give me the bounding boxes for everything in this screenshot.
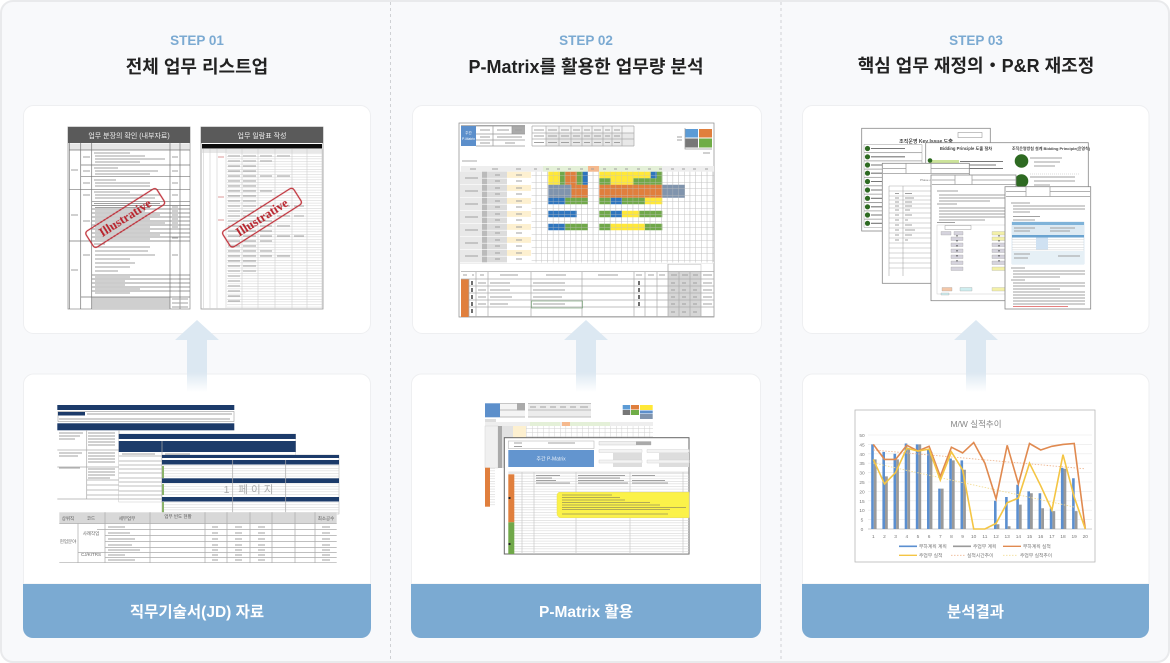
document: JD competency sheet: [119, 434, 296, 502]
footer bar: analysis result: [802, 584, 1149, 638]
footer label: P-Matrix 활용: [539, 603, 633, 621]
chart gridlines and axis: 0: [861, 527, 864, 533]
chart gridlines and axis: 25: [859, 480, 865, 486]
step label 02: STEP 02: [559, 33, 613, 48]
document: workload summary table: 상위직: [62, 515, 74, 522]
yellow callout: [557, 492, 689, 518]
document: P-Matrix front sheet: [504, 438, 689, 554]
document: workload summary table: 현업분야: [60, 538, 76, 545]
card: P-Matrix usage: [412, 374, 760, 584]
panel: step 02: [411, 33, 762, 638]
document: workload summary table: 업무 빈도 현황: [164, 513, 192, 520]
stamp: Illustrative: [221, 187, 303, 248]
footer label: 분석결과: [947, 603, 1004, 621]
arrow: up: [564, 320, 608, 392]
card: analysis result: [802, 374, 1149, 584]
chart gridlines and axis: 9: [961, 534, 964, 540]
document: P-Matrix weekly grid: [459, 123, 714, 317]
document: role confirmation table: 업무 분장의 확인 (내부자료): [88, 131, 170, 140]
chart gridlines and axis: 10: [971, 534, 977, 540]
blue title box: [508, 450, 594, 467]
chart legend: 부하계획 실적: [1023, 543, 1051, 550]
chart gridlines and axis: 15: [1027, 534, 1032, 540]
document: workload summary table: CJ/KITRS: [81, 552, 101, 557]
chart legend: 실적시간추이: [967, 552, 993, 559]
document: P-Matrix back sheet: [485, 403, 653, 507]
document: workload summary table: [59, 512, 337, 563]
chart: M/W performance trend: [855, 410, 1095, 562]
chart gridlines and axis: 18: [1060, 534, 1066, 540]
heading: step 02: P-Matrix를 활용한 업무량 분석: [468, 57, 704, 77]
document: role confirmation table: [68, 127, 190, 309]
document: bidding principle: 조직운영방침 설계 Bidding Principle(윤영칙): [1012, 145, 1091, 151]
document: task schedule table: [201, 127, 323, 309]
matrix scheduled blocks: [548, 172, 685, 230]
document: JD evaluation sheet: [162, 455, 339, 514]
matrix task table: [461, 264, 714, 317]
chart gridlines and axis: 3: [894, 534, 897, 540]
document: bidding principle: Bidding Principle 도출 절차: [940, 145, 992, 152]
chart gridlines and axis: 15: [859, 499, 865, 505]
chart gridlines and axis: 5: [861, 518, 864, 524]
footer bar: P-Matrix usage: [411, 584, 761, 638]
document: bidding principle: [926, 143, 1091, 243]
card: job description sources: [24, 374, 370, 584]
document: key issue list: 조직운영 Key Issue 도출: [899, 138, 953, 145]
card: redefined documents: [802, 106, 1149, 334]
chart gridlines and axis: 40: [859, 452, 865, 458]
card: job role documents: [24, 106, 370, 334]
chart gridlines and axis: 7: [939, 534, 942, 540]
chart gridlines and axis: 35: [859, 461, 865, 467]
stamp: Illustrative: Illustrative: [97, 196, 154, 240]
document: process flow sheet: [931, 175, 1016, 301]
document: P-Matrix front sheet: 주간 P-Matrix: [536, 456, 566, 462]
card: P-Matrix sheet: [412, 106, 762, 334]
step label 01: STEP 01: [170, 33, 224, 48]
footer label: 직무기술서(JD) 자료: [130, 603, 264, 621]
chart gridlines and axis: 2: [883, 534, 886, 540]
trend line: main work actual: [873, 463, 1074, 507]
matrix header block: [461, 126, 476, 146]
chart gridlines and axis: 13: [1005, 534, 1010, 540]
chart gridlines and axis: 45: [859, 442, 865, 448]
document: workload summary table: 코드: [87, 516, 95, 521]
document: workload summary table: 사례작업: [83, 530, 99, 537]
arrow: up: [954, 320, 998, 392]
chart gridlines and axis: 17: [1049, 534, 1055, 540]
chart gridlines and axis: 4: [905, 534, 908, 540]
chart legend: 주업무 계획: [973, 543, 996, 550]
chart gridlines and axis: 10: [859, 508, 865, 514]
arrow: up: [175, 320, 219, 392]
chart gridlines and axis: 11: [982, 534, 988, 540]
heading: step 03: 핵심 업무 재정의・P&R 재조정: [858, 56, 1094, 76]
document: workload summary table: 세부업무: [119, 515, 135, 522]
stamp: Illustrative: [85, 187, 166, 249]
document: P-Matrix weekly grid: 주간: [465, 130, 472, 135]
stamp: Illustrative: Illustrative: [233, 196, 291, 239]
chart gridlines and axis: 16: [1038, 534, 1044, 540]
chart legend: 주업무 실적: [919, 552, 942, 559]
document: role table sheet: [882, 163, 970, 283]
matrix quadrant legend: [685, 129, 698, 138]
matrix block cell grid: [532, 172, 714, 263]
document: JD evaluation sheet: 1 페이지: [224, 484, 276, 496]
footer bar: job description source: [23, 584, 371, 638]
document: workload summary table: 최소공수: [318, 515, 334, 522]
chart gridlines and axis: 6: [928, 534, 931, 540]
chart gridlines and axis: 1: [872, 534, 875, 540]
document: key issue list: [862, 128, 990, 231]
chart legend: 주업무 실적추이: [1020, 552, 1052, 559]
chart gridlines and axis: 5: [917, 534, 920, 540]
bars: planned departmental workload: [871, 444, 1075, 529]
panel: step 03: [802, 33, 1149, 638]
chart gridlines and axis: 20: [859, 489, 865, 495]
chart gridlines and axis: [859, 433, 1092, 540]
chart gridlines and axis: 20: [1083, 534, 1088, 540]
heading: step 01: 전체 업무 리스트업: [126, 57, 268, 77]
chart legend: 부하계획 계획: [919, 543, 947, 550]
document: JD duties sheet: [57, 405, 234, 499]
document: system screenshot sheet: [1005, 187, 1091, 309]
chart legend: [899, 543, 1052, 559]
chart gridlines and axis: 30: [859, 471, 865, 477]
chart gridlines and axis: 14: [1016, 534, 1021, 540]
chart gridlines and axis: 50: [859, 433, 865, 439]
document: P-Matrix weekly grid: P-Matrix: [462, 137, 475, 141]
step label 03: STEP 03: [949, 33, 1003, 48]
line: departmental actual: [873, 442, 1085, 529]
panel: step 01: [23, 33, 371, 638]
document: role table sheet: Phase of Concern: [920, 178, 944, 182]
chart gridlines and axis: 19: [1072, 534, 1077, 540]
bars: planned main work: [874, 444, 1078, 529]
chart gridlines and axis: 8: [950, 534, 953, 540]
line: main work actual: [873, 448, 1085, 529]
chart gridlines and axis: 12: [993, 534, 999, 540]
legend blocks: [623, 405, 630, 410]
document: task schedule table: 업무 일람표 작성: [238, 131, 286, 140]
chart: M/W performance trend: M/W 실적추이: [950, 419, 1002, 429]
trend line: actual hours: [873, 450, 1085, 469]
